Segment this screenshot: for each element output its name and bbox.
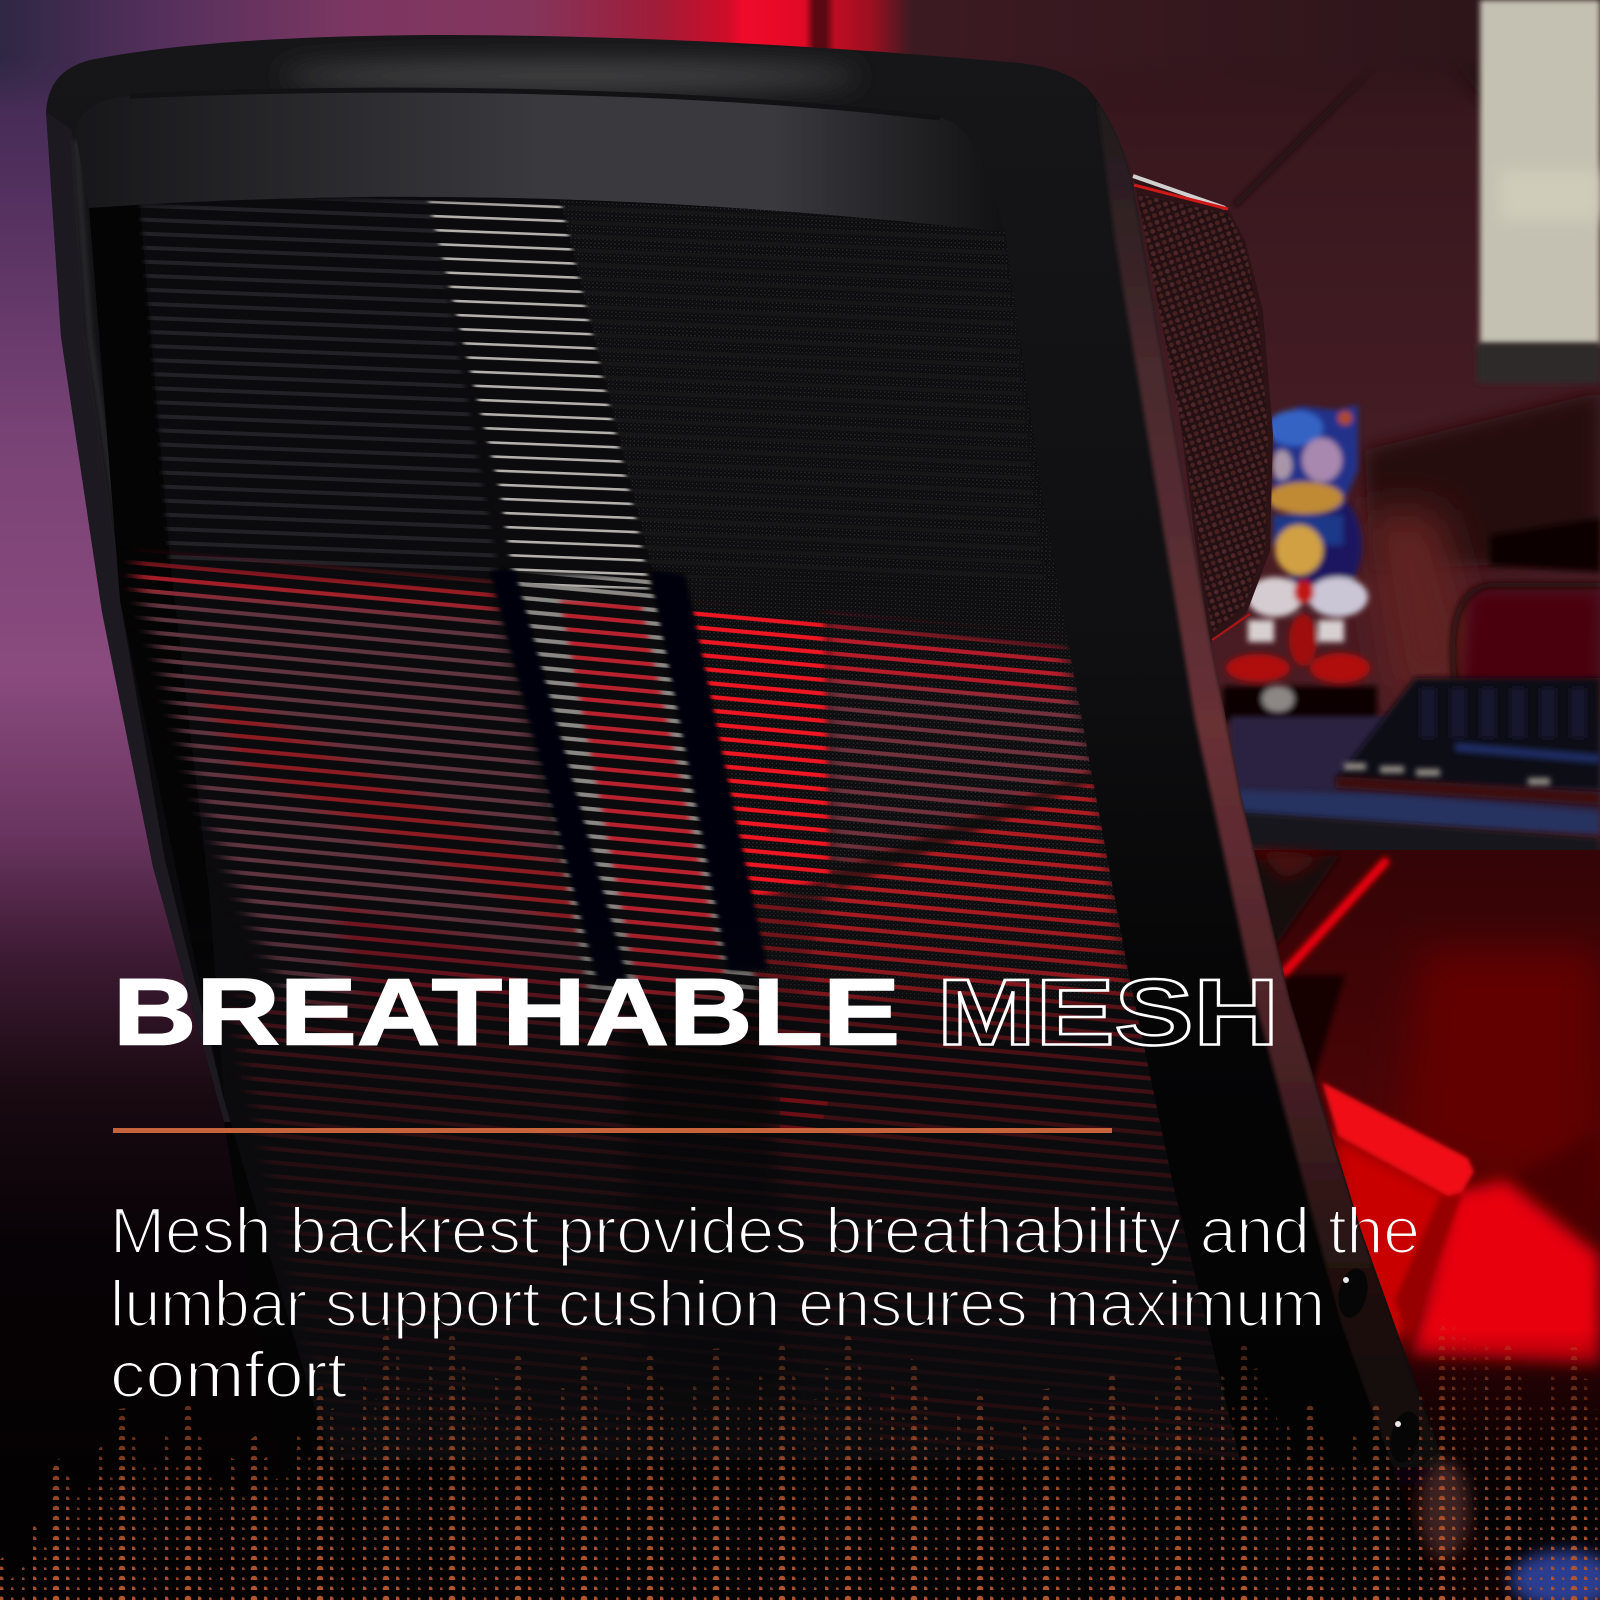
title xyxy=(113,960,1279,1066)
title: BREATHABLE xyxy=(113,960,900,1066)
desk and keyboard xyxy=(1230,678,1600,878)
neon bar xyxy=(1322,1082,1474,1196)
bottom vignette xyxy=(900,1320,1600,1600)
top rim highlight xyxy=(280,62,860,90)
neon line xyxy=(1285,862,1385,972)
central lines between the straps xyxy=(505,575,760,1000)
blurred figurine xyxy=(1223,405,1377,722)
mesh backrest xyxy=(60,190,1260,1490)
halftone dot pattern xyxy=(0,1318,1598,1600)
red-lit frame edge xyxy=(1097,100,1520,1600)
description text xyxy=(110,1194,1420,1411)
chair base glow xyxy=(1420,1460,1600,1600)
light stripe through mesh xyxy=(428,200,650,590)
mesh fine weave xyxy=(560,200,1140,1000)
description text: Mesh backrest provides breathability and the xyxy=(110,1194,1420,1267)
description text: lumbar support cushion ensures maximum xyxy=(110,1267,1325,1340)
headrest xyxy=(1133,176,1273,643)
description text: comfort xyxy=(110,1338,347,1411)
dark inner left band xyxy=(90,206,213,944)
top light band xyxy=(0,0,1479,90)
dark mesh straps xyxy=(490,570,628,985)
title: MESH xyxy=(937,960,1279,1064)
background: maroon wall and right-side room xyxy=(900,0,1600,900)
divider line xyxy=(113,1128,1112,1133)
distant dim lower lines xyxy=(230,1000,1240,1460)
monitor xyxy=(1477,0,1600,572)
recessed frame panel xyxy=(75,90,1005,232)
frame bolts xyxy=(1334,1266,1424,1465)
left frame edge xyxy=(46,112,240,1122)
background: purple room wall xyxy=(0,0,1000,1600)
lower mesh lit lines xyxy=(135,560,1250,1470)
upper mesh dim lines xyxy=(140,197,1045,580)
red LED-lit floor xyxy=(1240,850,1600,1500)
